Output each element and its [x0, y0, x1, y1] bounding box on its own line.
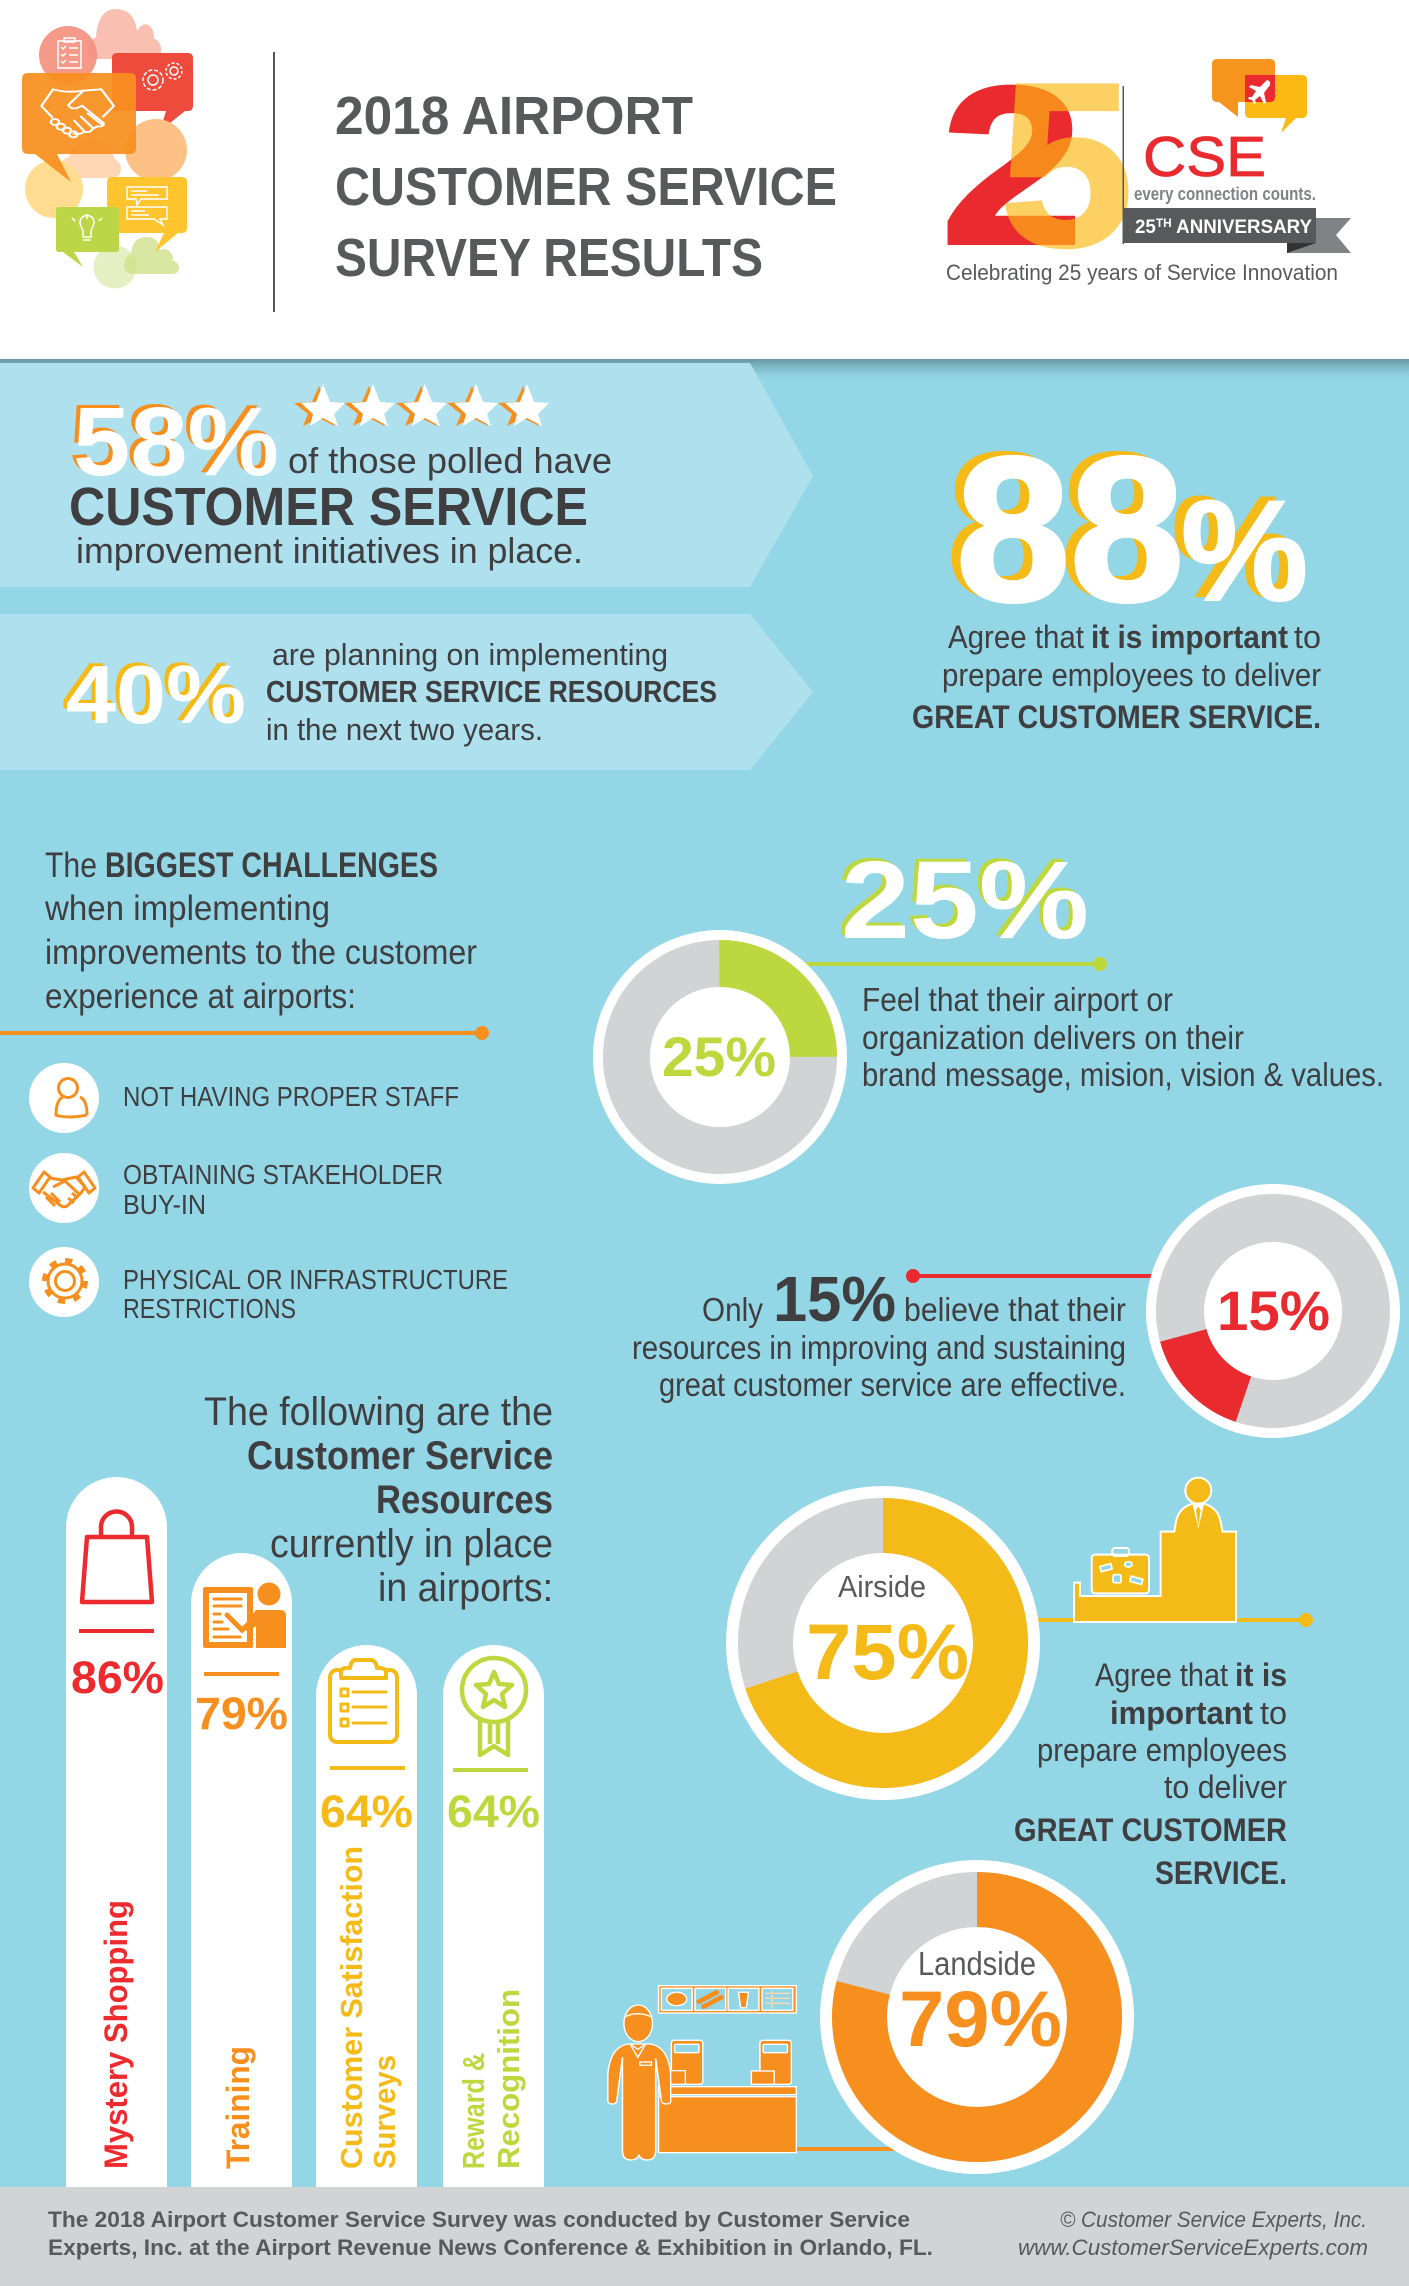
text: agree important: it is important: [1091, 619, 1288, 655]
icon: medal: [462, 1658, 526, 1755]
text: only 15%: great customer service are effective.: [659, 1366, 1126, 1403]
heading: biggest challenges: BIGGEST CHALLENGES: [105, 846, 438, 885]
donut chart: airside 75%: 75%: [806, 1607, 969, 1696]
text: only 15%: resources in improving and sustaining: [632, 1329, 1126, 1366]
challenge: stakeholder buy-in: OBTAINING STAKEHOLDER: [123, 1159, 443, 1190]
text: airside agree: SERVICE.: [1155, 1855, 1287, 1891]
heading: biggest challenges: improvements to the customer: [45, 933, 477, 972]
text: initiatives: of those polled have: [288, 440, 612, 481]
text: agree important: GREAT CUSTOMER SERVICE.: [912, 699, 1321, 735]
icon: shopping bag: [82, 1512, 152, 1602]
bar: reward and recognition: Recognition: [491, 1989, 526, 2169]
text: brand message: organization delivers on their: [862, 1019, 1244, 1056]
donut chart: landside 79%: Landside: [918, 1945, 1036, 1982]
text: planning: [266, 637, 717, 747]
icon: clipboard: [330, 1660, 397, 1742]
donut chart: 15%: [1146, 1184, 1400, 1438]
heading: resources: Customer Service: [247, 1434, 553, 1478]
text: planning: are planning on implementing: [272, 637, 668, 672]
88% figure: %: [1181, 472, 1308, 631]
title: 2018 AIRPORT: [335, 86, 693, 146]
58% figure: 58%: [73, 387, 279, 496]
bar: training: 79%: [195, 1688, 288, 1739]
header band: [0, 0, 1409, 383]
text: agree important: Agree that: [948, 619, 1084, 655]
heading: resources: Resources: [376, 1478, 553, 1522]
25% figure: 25%: [841, 839, 1089, 962]
bar: training: [191, 1553, 292, 2190]
logo: CSE 25th anniversary: Celebrating 25 years of Service Innovation: [946, 260, 1338, 285]
text: airside agree: Agree that: [1095, 1657, 1228, 1693]
bar: reward and recognition: [443, 1645, 544, 2190]
title: SURVEY RESULTS: [335, 228, 763, 288]
logo: CSE 25th anniversary: 5: [1000, 36, 1133, 295]
icon: gear: [29, 1247, 99, 1317]
heading: resources: The following are the: [204, 1390, 553, 1434]
text: planning: CUSTOMER SERVICE RESOURCES: [266, 674, 717, 709]
icon: trainer at board: [203, 1582, 286, 1648]
text: only 15%: 15%: [773, 1263, 896, 1335]
text: airside agree: to deliver: [1164, 1769, 1287, 1805]
text: initiatives: CUSTOMER SERVICE: [69, 477, 588, 537]
heading: resources: currently in place: [270, 1522, 553, 1566]
text: only 15%: Only: [702, 1291, 763, 1328]
text: airside agree: [1014, 1657, 1287, 1891]
text: initiatives: [69, 440, 612, 571]
donut chart: 25%: 25%: [662, 1025, 776, 1088]
divider: [273, 52, 275, 312]
donut chart: airside 75%: [726, 1486, 1040, 1800]
bar: mystery shopping: 86%: [71, 1652, 164, 1703]
logo: CSE 25th anniversary: every connection counts.: [1134, 184, 1316, 204]
logo: CSE 25th anniversary: [941, 36, 1351, 295]
orange rule: [0, 1026, 489, 1040]
text: agree important: prepare employees to deliver: [942, 657, 1321, 693]
text: only 15%: believe that their: [904, 1291, 1126, 1328]
text: airside agree: important: [1110, 1695, 1253, 1731]
text: airside agree: prepare employees: [1037, 1732, 1287, 1768]
challenge: stakeholder buy-in: BUY-IN: [123, 1189, 206, 1220]
icon: food vendor at counter: [608, 1986, 796, 2160]
challenge: infrastructure: [29, 1247, 508, 1324]
text: planning: in the next two years.: [266, 712, 543, 747]
challenge: staff: NOT HAVING PROPER STAFF: [123, 1081, 459, 1112]
icon: five stars: [294, 384, 549, 426]
panel: 58% customer service initiatives: [0, 363, 813, 587]
text: survey note: Experts, Inc. at the Airport Revenue News Conference & Exhibition in Orlando, FL.: [48, 2235, 933, 2260]
heading: biggest challenges: The: [45, 846, 97, 885]
logo: CSE 25th anniversary: 2: [941, 41, 1083, 291]
88% figure: 88: [947, 411, 1175, 640]
text: copyright: www.CustomerServiceExperts.com: [1018, 2235, 1368, 2260]
40% figure: 40%: [62, 645, 242, 738]
bar: customer satisfaction surveys: Customer Satisfaction: [334, 1846, 369, 2169]
icon: check-in counter with agent: [1074, 1478, 1236, 1622]
88% figure: [947, 411, 1308, 644]
icon: speech bubble cluster: [22, 9, 193, 288]
donut chart: landside 79%: 79%: [899, 1974, 1062, 2063]
bar: customer satisfaction surveys: [316, 1645, 417, 2190]
bar: mystery shopping: [66, 1477, 167, 2190]
heading: biggest challenges: when implementing: [44, 889, 330, 928]
text: agree important: to: [1294, 619, 1321, 655]
text: airside agree: GREAT CUSTOMER: [1014, 1812, 1287, 1848]
logo: CSE 25th anniversary: TH: [1156, 216, 1172, 230]
title: CUSTOMER SERVICE: [335, 157, 837, 217]
panel: 40% planning: [0, 614, 813, 770]
text: brand message: [862, 981, 1384, 1093]
challenge: infrastructure: PHYSICAL OR INFRASTRUCTURE: [123, 1264, 508, 1295]
heading: resources: in airports:: [378, 1566, 553, 1610]
connector: green: [800, 957, 1107, 971]
icon: handshake: [41, 89, 114, 137]
58% figure: 58%: [69, 384, 275, 493]
25% figure: 25%: [837, 836, 1085, 959]
title: [335, 86, 837, 288]
text: brand message: Feel that their airport or: [862, 981, 1173, 1018]
40% figure: 40%: [66, 648, 246, 741]
connector: yellow: [1030, 1613, 1313, 1627]
bar: training: Training: [220, 2046, 256, 2169]
text: airside agree: to: [1260, 1695, 1287, 1731]
bar: reward and recognition: Reward &: [456, 2053, 491, 2169]
text: survey note: [48, 2207, 933, 2260]
heading: resources: [204, 1390, 553, 1610]
88% figure: 88: [956, 415, 1184, 644]
heading: biggest challenges: [44, 846, 477, 1016]
bar: customer satisfaction surveys: 64%: [320, 1786, 413, 1837]
connector: red: [906, 1269, 1158, 1283]
donut chart: 25%: [593, 930, 847, 1184]
icon: person: [29, 1063, 99, 1133]
donut chart: 15%: 15%: [1217, 1279, 1330, 1342]
donut chart: landside 79%: [820, 1860, 1134, 2174]
challenge: staff: [29, 1063, 459, 1133]
text: initiatives: improvement initiatives in place.: [76, 530, 583, 571]
heading: biggest challenges: experience at airports:: [45, 977, 356, 1016]
text: only 15%: [632, 1263, 1126, 1403]
footer: [0, 2187, 1409, 2286]
connector: orange: [796, 2147, 906, 2151]
challenge: infrastructure: RESTRICTIONS: [123, 1293, 296, 1324]
text: agree important: [912, 619, 1321, 735]
text: copyright: [1018, 2207, 1368, 2260]
challenge: stakeholder buy-in: [29, 1153, 443, 1223]
88% figure: %: [1172, 468, 1299, 627]
icon: handshake: [29, 1153, 99, 1223]
text: airside agree: it is: [1235, 1657, 1287, 1693]
logo: CSE 25th anniversary: ANNIVERSARY: [1172, 217, 1312, 238]
bar: reward and recognition: 64%: [447, 1786, 540, 1837]
text: copyright: © Customer Service Experts, Inc.: [1060, 2207, 1367, 2232]
bar: customer satisfaction surveys: Surveys: [367, 2055, 402, 2169]
logo: CSE 25th anniversary: 25: [1135, 217, 1156, 238]
text: survey note: The 2018 Airport Customer Service Survey was conducted by Customer Service: [48, 2207, 910, 2232]
logo: CSE 25th anniversary: CSE: [1143, 125, 1266, 189]
bar: mystery shopping: Mystery Shopping: [98, 1900, 134, 2169]
donut chart: airside 75%: Airside: [838, 1569, 926, 1604]
